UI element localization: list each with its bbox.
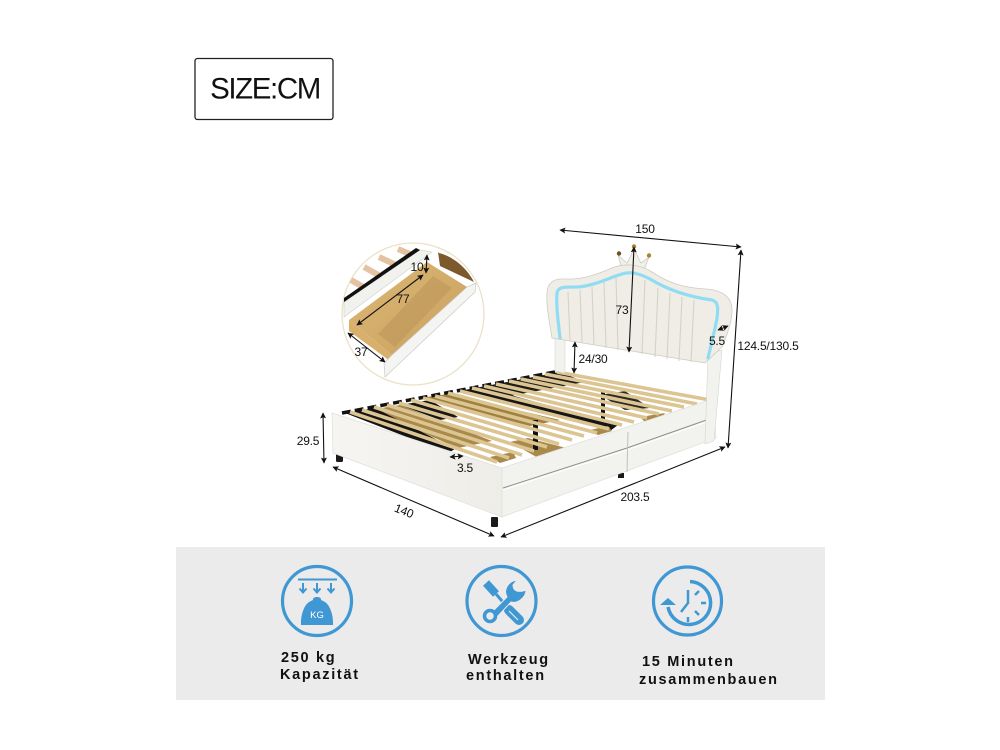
bed frame	[332, 371, 716, 527]
headboard and overall dimensions: 73	[616, 303, 629, 317]
headboard	[547, 244, 732, 444]
icon: weight capacity: KG	[310, 610, 324, 621]
label: tools: Werkzeug	[468, 652, 550, 668]
headboard and overall dimensions: 24/30	[578, 352, 608, 366]
posts	[555, 338, 565, 373]
label: time: zusammenbauen	[639, 672, 779, 688]
size badge	[195, 58, 333, 120]
drawer detail inset	[342, 243, 484, 385]
label: tools	[466, 652, 550, 684]
slats in inset	[351, 249, 412, 288]
label: capacity: Kapazität	[280, 667, 360, 683]
drawer dimensions: 10	[411, 260, 424, 274]
foot end panel	[332, 413, 502, 517]
drawer seams	[503, 417, 715, 488]
drawer dimensions: 77	[397, 292, 410, 306]
channels	[568, 278, 694, 362]
label: capacity: 250 kg	[281, 650, 336, 666]
label: tools: enthalten	[466, 668, 546, 684]
drawer end panel	[438, 252, 474, 282]
bed dimensions: 29.5	[297, 434, 320, 448]
icon: weight capacity	[282, 566, 352, 636]
centre beam	[533, 420, 538, 450]
crown	[618, 249, 649, 273]
label: time: 15 Minuten	[642, 654, 735, 670]
bed dimensions	[297, 413, 725, 537]
headboard and overall dimensions: 124.5/130.5	[737, 339, 799, 353]
drawer dimensions: 37	[355, 345, 368, 359]
under-deck wood and shadow	[370, 405, 492, 448]
slats	[350, 372, 710, 462]
size badge: SIZE:CM	[210, 72, 320, 106]
headboard and overall dimensions: 150	[635, 222, 655, 236]
headboard and overall dimensions: 5.5	[709, 334, 726, 348]
headboard and overall dimensions	[560, 222, 799, 448]
drawer dimensions	[348, 255, 427, 362]
open drawer	[349, 262, 467, 355]
side rail	[502, 399, 716, 517]
bed dimensions: 203.5	[620, 490, 650, 504]
feature panel	[176, 547, 825, 700]
label: capacity	[280, 650, 360, 683]
bed dimensions: 140	[392, 501, 416, 521]
inner deck	[340, 372, 713, 466]
LED strip	[557, 273, 718, 358]
label: time	[639, 654, 779, 688]
feet	[336, 453, 343, 462]
padded board	[547, 265, 732, 363]
icon: clock	[654, 567, 722, 635]
bed dimensions: 3.5	[457, 461, 474, 475]
icon: tools	[467, 566, 536, 636]
